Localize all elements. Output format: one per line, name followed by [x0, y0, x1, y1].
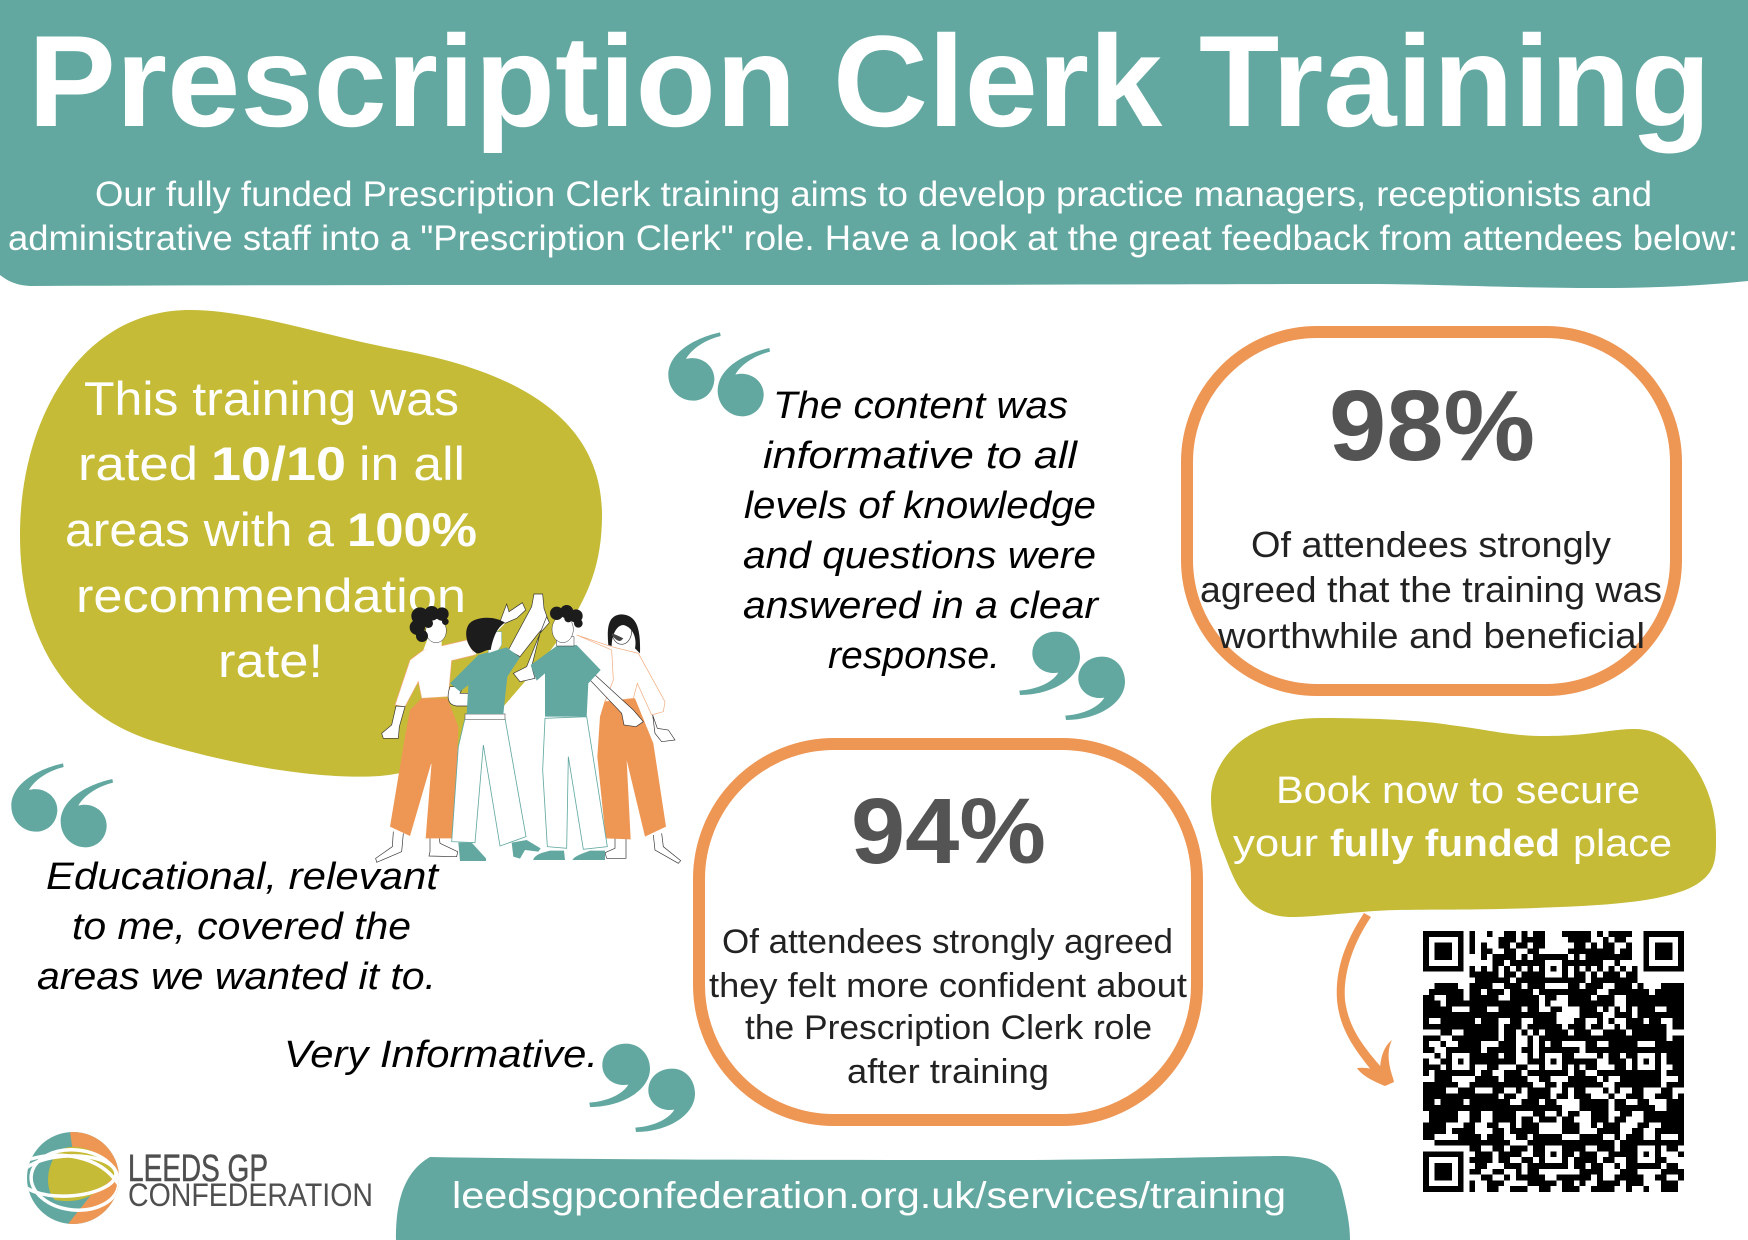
rating text: [65, 372, 477, 687]
banner background: [0, 0, 1748, 288]
quote text: response.: [828, 635, 1000, 677]
person: left, curly hair: [376, 603, 526, 862]
callout text: Book now to secure: [1276, 770, 1640, 812]
stat description: the Prescription Clerk role: [745, 1009, 1152, 1047]
intro text: Our fully funded Prescription Clerk training aims to develop practice managers, receptionists and: [95, 175, 1652, 214]
stat description: [709, 923, 1188, 1091]
intro text: administrative staff into a "Prescription Clerk" role. Have a look at the great feedback from attendees below:: [8, 219, 1738, 258]
rating text: in all: [359, 437, 465, 490]
pill background: [396, 1156, 1350, 1240]
rating text: This training was: [84, 372, 459, 425]
icon: closing quotation marks: [1019, 632, 1125, 720]
rating text: 100%: [347, 503, 477, 556]
stat card: 94%: [699, 744, 1197, 1120]
person: centre-left, back view: [448, 594, 549, 861]
quote text: [743, 385, 1099, 677]
rating text: areas with a: [65, 503, 335, 556]
stat description: they felt more confident about: [709, 967, 1188, 1005]
stat number: 98%: [1329, 370, 1535, 482]
header banner: [0, 0, 1748, 288]
stat description: agreed that the training was: [1200, 569, 1662, 610]
rating text: rated: [78, 437, 198, 490]
logo: Leeds GP Confederation: [19, 1132, 373, 1224]
quote text: The content was: [773, 385, 1068, 427]
arrow: callout to QR code: [1337, 913, 1394, 1086]
panel: 10/10 rating blob: [20, 310, 602, 777]
quote text: answered in a clear: [743, 585, 1099, 627]
quote text: [37, 856, 598, 1076]
stat description: after training: [847, 1053, 1049, 1091]
link text: leedsgpconfederation.org.uk/services/training: [452, 1175, 1286, 1216]
orange rounded frame: [1187, 332, 1676, 690]
callout text: [1233, 770, 1672, 865]
stat card: 98%: [1187, 332, 1676, 690]
rating text: recommendation: [76, 569, 466, 622]
quote text: Very Informative.: [284, 1034, 598, 1076]
stat number: 94%: [851, 779, 1046, 883]
intro text: [8, 175, 1738, 258]
quote text: to me, covered the: [72, 906, 411, 948]
QR code: [1423, 931, 1684, 1192]
stat description: Of attendees strongly: [1251, 524, 1611, 565]
icon: closing quotation marks: [589, 1044, 695, 1132]
stat description: Of attendees strongly agreed: [722, 923, 1173, 961]
quote text: Educational, relevant: [46, 856, 440, 898]
callout text: place: [1573, 823, 1672, 865]
callout text: your: [1233, 823, 1318, 865]
wordmark: [128, 1148, 373, 1213]
orange rounded frame: [699, 744, 1197, 1120]
icon: globe: [27, 1132, 119, 1224]
rating text: rate!: [218, 634, 323, 687]
icon: opening quotation marks: [11, 763, 113, 847]
rating text: 10/10: [211, 437, 346, 490]
stat description: worthwhile and beneficial: [1217, 615, 1645, 656]
quote text: areas we wanted it to.: [37, 956, 436, 998]
quote text: and questions were: [743, 535, 1096, 577]
olive blob: [1211, 718, 1716, 917]
footer: website link pill: [396, 1156, 1350, 1240]
title: Prescription Clerk Training: [28, 8, 1711, 154]
callout text: fully funded: [1330, 823, 1560, 865]
wordmark: CONFEDERATION: [128, 1177, 373, 1213]
quote text: levels of knowledge: [744, 485, 1096, 527]
person: centre-right, front view: [513, 605, 643, 860]
callout: book now: [1211, 718, 1716, 917]
quote: The content was informative: [668, 332, 1125, 720]
quote: Educational, relevant: [11, 763, 695, 1132]
icon: opening quotation marks: [668, 332, 770, 416]
wordmark: LEEDS GP: [128, 1148, 268, 1190]
illustration: four people high-fiving: [376, 594, 681, 863]
stat description: [1200, 524, 1662, 656]
olive blob: [20, 310, 602, 777]
person: right, orange trousers: [577, 614, 681, 863]
quote text: informative to all: [763, 435, 1079, 477]
